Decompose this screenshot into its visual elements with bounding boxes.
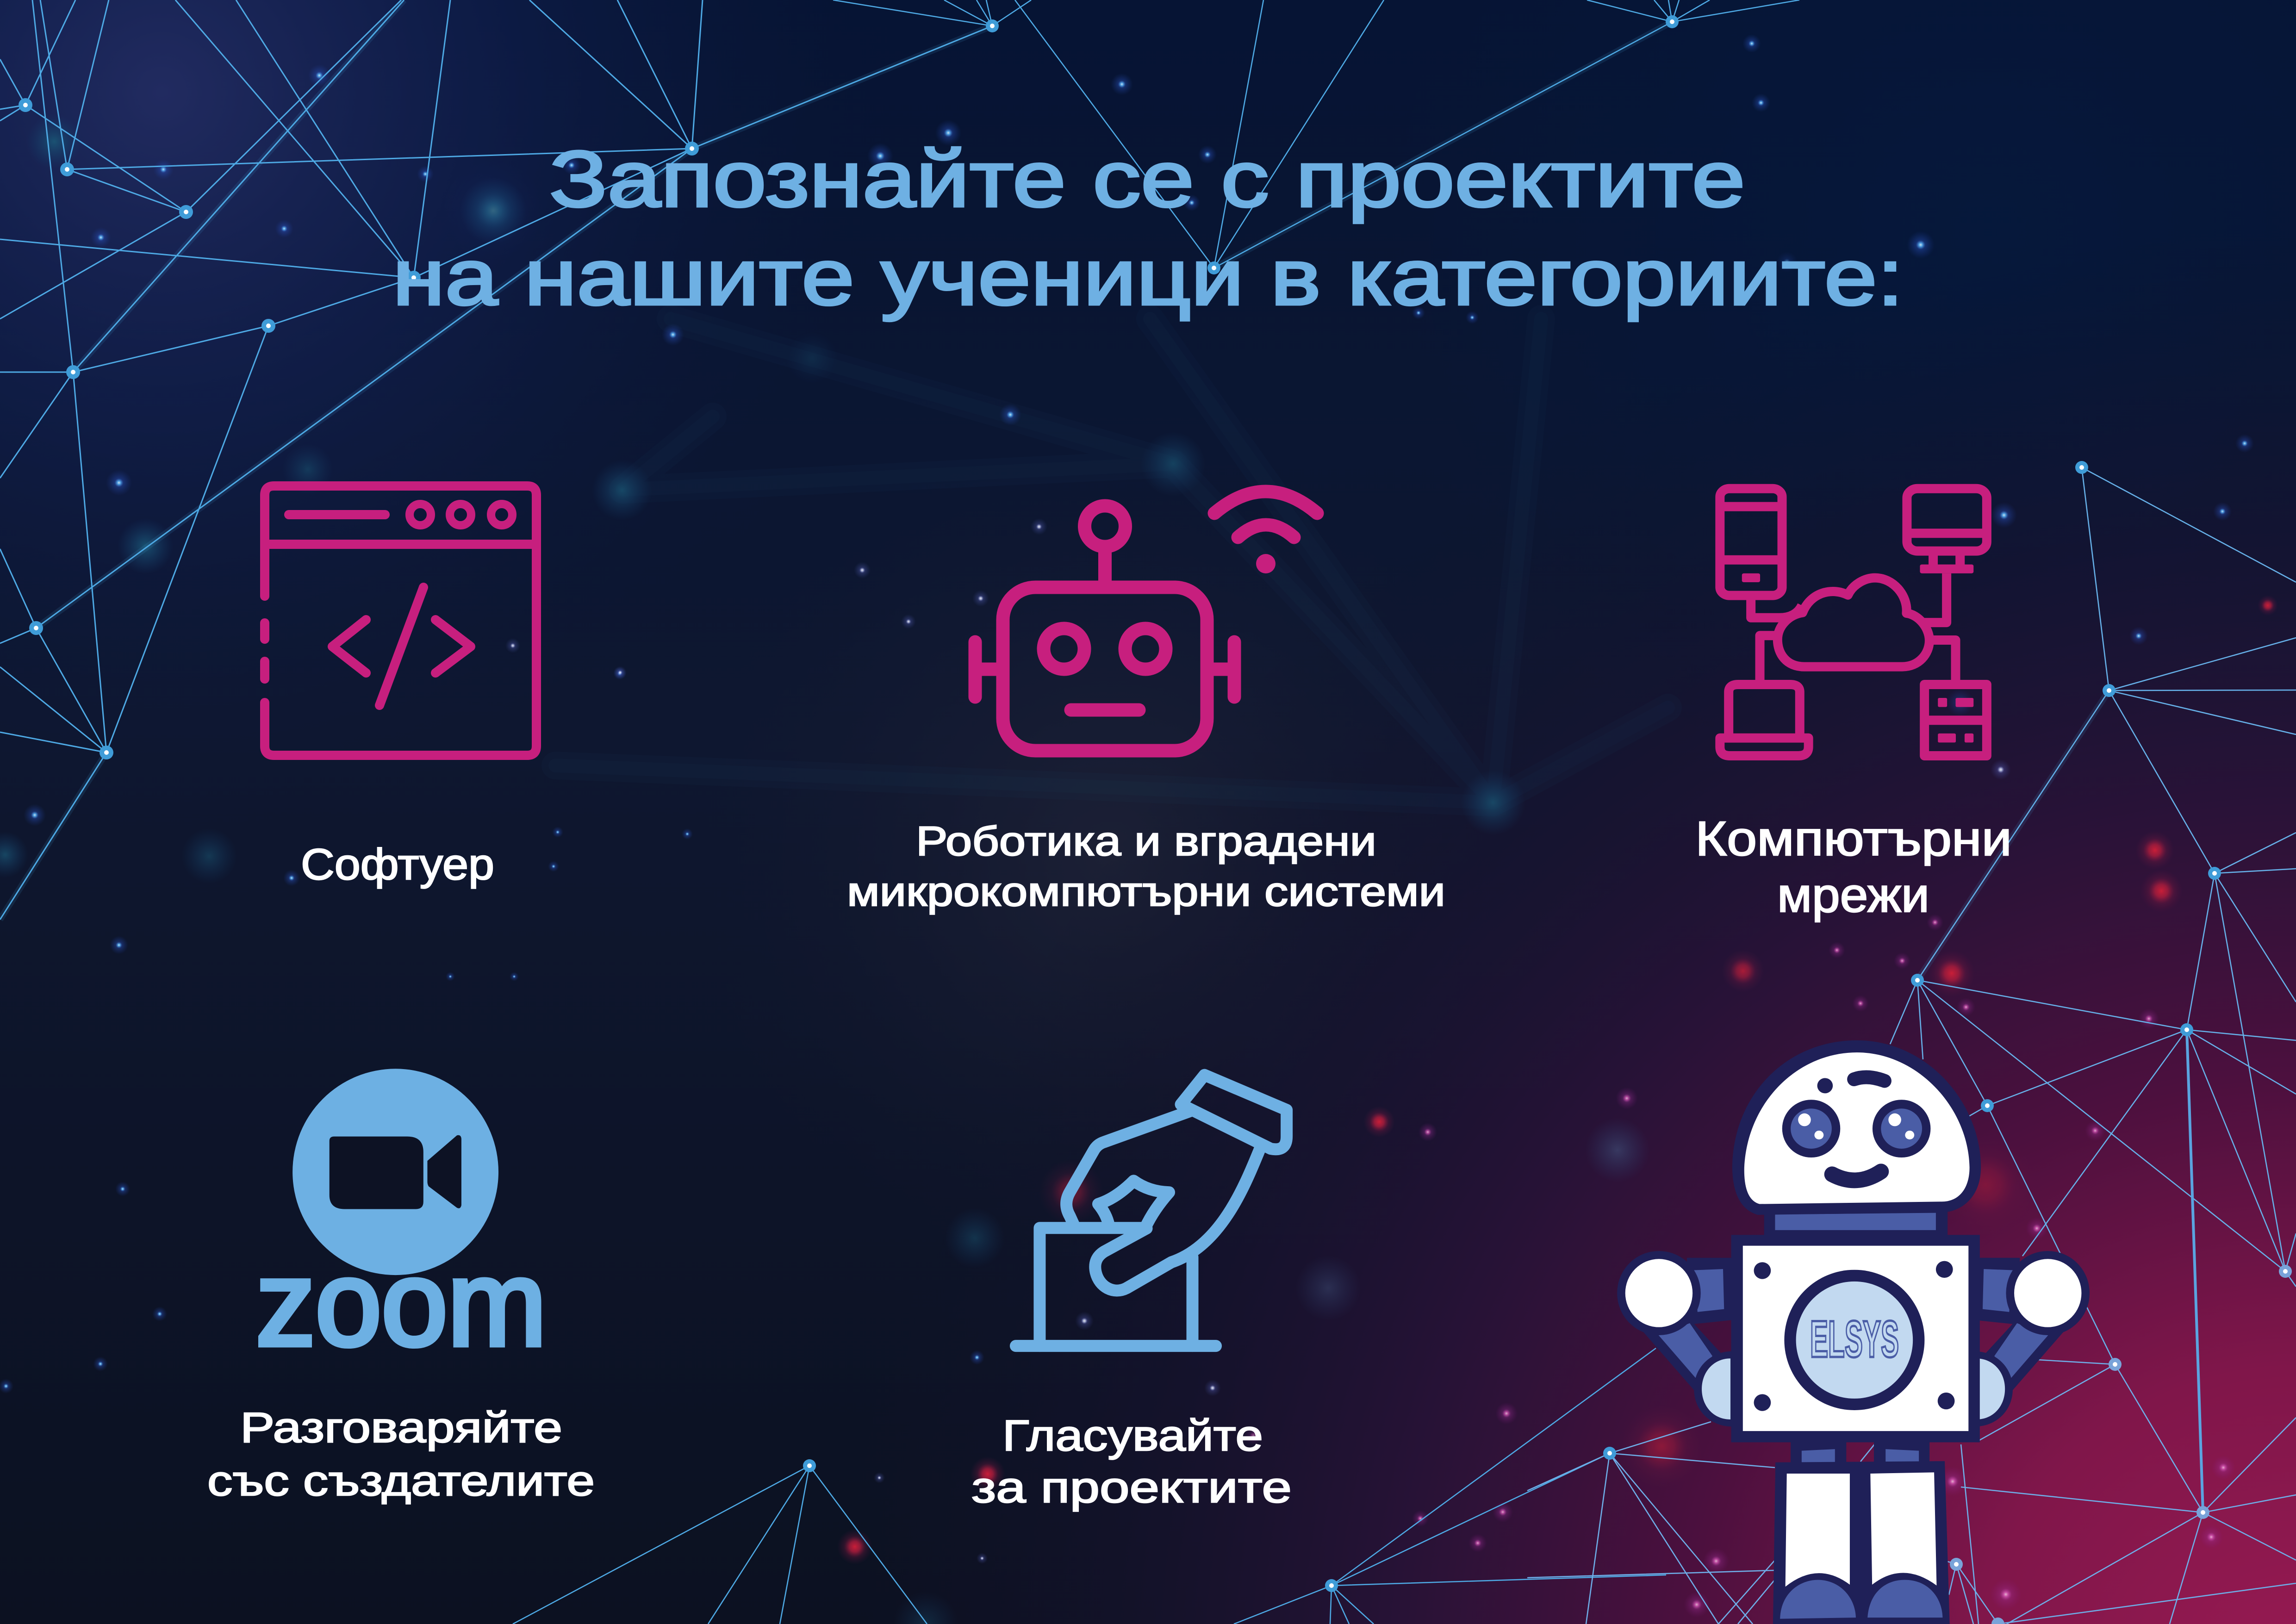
title: Запознайте се с проектите [549,135,1745,224]
stars: red [837,595,2278,1564]
background glow spots [0,114,1650,1624]
icon: computer networks [1720,489,1987,756]
label: vote: за проектите [971,1463,1292,1512]
icon: robot head with wifi [975,492,1317,751]
robot left arm [1617,1251,1733,1427]
robot hips [1791,1440,1929,1465]
robot neck [1764,1207,1948,1240]
label: vote: Гласувайте [1002,1411,1263,1460]
robot body [1731,1235,1980,1442]
title: на нашите ученици в категориите: [392,233,1904,322]
title [392,135,1904,322]
icon: zoom logo: zoom [256,1235,547,1371]
icon: software code window [265,486,536,755]
stars: pink [1244,914,2235,1618]
label: talk with creators: със създателите [207,1457,595,1505]
label: software: Софтуер [301,840,494,889]
stars: white [505,518,2011,1564]
label: computer networks: мрежи [1777,868,1929,922]
label: robotics: микрокомпютърни системи [847,868,1445,915]
label: talk with creators: Разговаряйте [240,1404,562,1451]
robot right arm [1974,1251,2090,1427]
label: computer networks: Компютърни [1695,812,2012,866]
label: computer networks [1695,812,2012,922]
robot legs [1773,1461,1950,1624]
robot head [1732,1040,1981,1215]
label: robotics: Роботика и вградени [916,818,1376,864]
label: robotics [847,818,1445,915]
label: vote [971,1411,1292,1512]
icon: zoom logo [256,1069,547,1371]
label: talk with creators [207,1404,595,1505]
robot chest logo: ELSYS [1810,1310,1899,1368]
robot mascot [1617,1040,2090,1624]
icon: hand voting at ballot box [1016,1075,1287,1346]
